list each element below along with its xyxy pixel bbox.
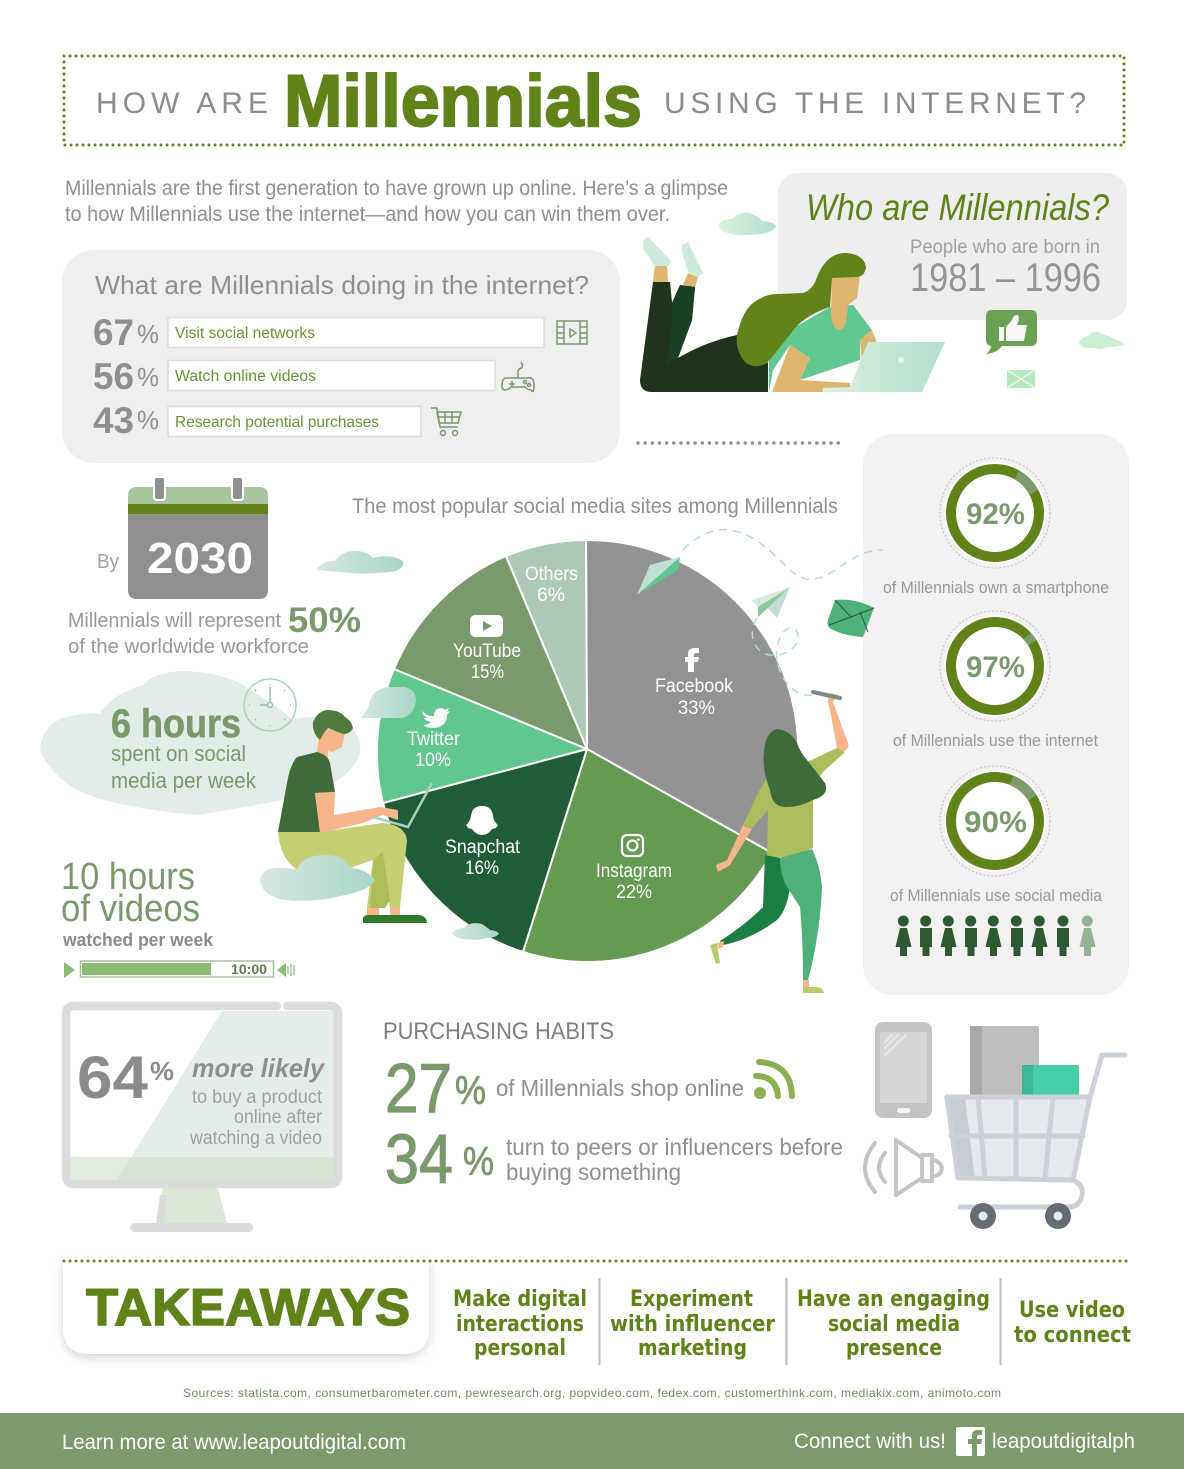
pie label: facebook: 33% — [678, 698, 715, 719]
pie chart: social media sites — [377, 540, 798, 962]
stat: 56 percent: % — [137, 362, 159, 392]
icon: green envelope — [827, 600, 874, 637]
calendar: by 2030: By — [97, 551, 119, 573]
stat: 67 percent: 67 — [93, 312, 134, 353]
dotted divider — [638, 441, 845, 445]
monitor: 64 percent: % — [150, 1056, 174, 1086]
takeaway: social presence: presence — [846, 1336, 942, 1361]
dashed flight paths — [683, 530, 883, 695]
pie label: instagram: 22% — [616, 882, 652, 903]
pie label: facebook — [655, 648, 733, 719]
illustration: woman drawing — [710, 692, 848, 993]
panel: what are millennials doing: What are Millennials doing in the internet? — [95, 270, 589, 300]
footer: leapoutdigitalph — [992, 1430, 1135, 1453]
takeaway: video — [1014, 1298, 1131, 1348]
ring: 97 percent: 97% — [966, 651, 1025, 684]
cloud — [316, 551, 403, 574]
monitor: 64 percent: online after — [234, 1107, 323, 1128]
icon: shopping cart with boxes — [947, 1026, 1125, 1229]
icon: paper plane — [752, 587, 790, 618]
takeaway: personal: interactions — [456, 1312, 584, 1337]
stat: 27 percent: 27 — [385, 1049, 452, 1127]
takeaway: social presence: social media — [828, 1312, 960, 1337]
video progress player — [64, 961, 294, 978]
takeaway: personal: personal — [474, 1336, 566, 1361]
stat: 34 percent: turn to peers or influencers before — [506, 1134, 843, 1160]
pie label: others: Others — [525, 564, 578, 585]
illustration: woman lying with laptop — [640, 237, 945, 392]
pie label: twitter: Twitter — [407, 729, 461, 750]
icon: thumbs up bubble — [986, 310, 1037, 354]
pie label: youtube — [453, 615, 521, 683]
title banner: USING THE INTERNET? — [664, 87, 1086, 120]
ring: 92 percent — [940, 458, 1050, 568]
icon: paper plane — [637, 557, 680, 595]
monitor: 64 percent — [66, 1006, 338, 1232]
takeaway: personal: Make digital — [453, 1287, 587, 1312]
panel: who are millennials: 1981 – 1996 — [910, 256, 1101, 300]
takeaway: influencer: Experiment — [630, 1287, 753, 1312]
caption: smartphone: of Millennials own a smartphone — [883, 578, 1109, 597]
stat: 27 percent: % — [455, 1069, 486, 1113]
pie label: youtube: 15% — [471, 662, 504, 683]
text: 6 hours — [111, 702, 257, 793]
stat: 43 percent — [93, 400, 421, 441]
calendar: by 2030: 2030 — [147, 534, 253, 583]
ring: 90 percent — [940, 766, 1050, 876]
text: 10 hours of videos: 10 hours — [61, 856, 195, 898]
icon: smartphone — [875, 1022, 932, 1118]
illustration: seated man with laptop — [260, 710, 432, 923]
stat: 67 percent: Visit social networks — [175, 325, 315, 342]
intro text: Millennials are the first generation to have grown up online. Here’s a glimpse — [65, 177, 728, 200]
pie label: snapchat: 16% — [465, 858, 499, 879]
ring: 90 percent: 90% — [964, 806, 1027, 839]
text: workforce stat: 50% — [288, 601, 361, 640]
text: workforce stat — [68, 601, 361, 658]
icon: envelope — [1007, 370, 1035, 388]
stat: 56 percent: 56 — [93, 356, 134, 397]
text: 6 hours: spent on social — [111, 741, 246, 766]
monitor: 64 percent: to buy a product — [192, 1087, 323, 1108]
pie label: snapchat: Snapchat — [445, 837, 521, 858]
text: 10 hours of videos: watched per week — [62, 930, 214, 950]
footer — [0, 1413, 1184, 1469]
pie label: others — [525, 564, 578, 606]
ring: 97 percent — [940, 611, 1050, 721]
intro text: to how Millennials use the internet—and how you can win them over. — [65, 203, 670, 226]
stat: 67 percent: % — [137, 319, 159, 349]
cloud — [452, 923, 499, 940]
caption: social media: of Millennials use social media — [890, 886, 1103, 905]
intro text — [65, 177, 728, 226]
heading: pie chart: The most popular social media sites among Millennials — [352, 495, 838, 518]
calendar: by 2030 — [97, 477, 268, 599]
icon: game controller — [502, 362, 534, 391]
takeaway: video: Use video — [1019, 1298, 1125, 1323]
panel: what are millennials doing — [62, 250, 620, 463]
cloud — [719, 213, 776, 235]
panel: device stats — [863, 434, 1129, 995]
monitor: 64 percent: watching a video — [189, 1128, 322, 1149]
icon: speech bubble — [360, 687, 416, 718]
panel: takeaways heading: TAKEAWAYS — [86, 1279, 410, 1337]
caption: internet: of Millennials use the internet — [893, 731, 1098, 750]
stat: 43 percent: % — [137, 405, 159, 435]
panel: who are millennials: People who are born in — [910, 237, 1100, 258]
panel: takeaways heading — [63, 1258, 429, 1357]
icon: facebook — [956, 1427, 985, 1456]
icon: clock cloud background — [40, 671, 360, 815]
stat: 27 percent — [385, 1049, 744, 1127]
stat: 56 percent — [93, 356, 495, 397]
video progress player: 10:00 — [231, 961, 267, 977]
title banner: Millennials — [284, 61, 642, 142]
stat: 56 percent: Watch online videos — [175, 368, 316, 385]
takeaway: social presence: Have an engaging — [797, 1287, 990, 1312]
monitor: 64 percent: 64 — [77, 1044, 149, 1111]
dotted line: takeaways — [64, 1260, 1130, 1262]
text: 6 hours: media per week — [111, 768, 257, 793]
stat: 27 percent: of Millennials shop online — [496, 1075, 744, 1101]
monitor: 64 percent: more likely — [192, 1053, 325, 1083]
stat: 67 percent — [93, 312, 544, 353]
takeaway: social presence — [797, 1287, 990, 1361]
cloud — [1079, 332, 1124, 349]
icon: speaker — [865, 1140, 942, 1195]
panel: who are millennials — [778, 173, 1127, 320]
stat: 34 percent: % — [463, 1140, 494, 1184]
pie label: twitter — [407, 708, 461, 771]
text: 6 hours: 6 hours — [111, 702, 241, 746]
stat: 43 percent: 43 — [93, 400, 134, 441]
icon: shopping cart — [431, 408, 461, 436]
icon: clock — [244, 679, 296, 731]
icon: rss — [754, 1062, 792, 1099]
pie label: others: 6% — [537, 585, 565, 606]
heading: purchasing habits: PURCHASING HABITS — [383, 1018, 614, 1045]
stat: 34 percent: buying something — [506, 1159, 681, 1185]
footer: Connect with us! — [794, 1430, 946, 1453]
text: 10 hours of videos — [61, 856, 214, 950]
pie label: youtube: YouTube — [453, 641, 521, 662]
people row — [896, 916, 1096, 956]
stat: 34 percent — [385, 1120, 843, 1198]
pie label: twitter: 10% — [415, 750, 451, 771]
panel: who are millennials: Who are Millennials? — [806, 187, 1109, 228]
text: workforce stat: of the worldwide workforce — [68, 636, 309, 658]
icon: film strip — [557, 321, 587, 344]
takeaway: influencer — [610, 1287, 775, 1361]
title banner: HOW ARE — [96, 87, 268, 120]
pie label: instagram: Instagram — [596, 861, 672, 882]
stat: 43 percent: Research potential purchases — [175, 414, 379, 431]
ring: 92 percent: 92% — [966, 498, 1025, 531]
takeaway: video: to connect — [1014, 1323, 1131, 1348]
takeaway: influencer: marketing — [638, 1336, 747, 1361]
pie label: snapchat — [445, 806, 521, 879]
stat: 34 percent: 34 — [385, 1120, 453, 1198]
sources: Sources: statista.com, consumerbarometer.com, pewresearch.org, popvideo.com, fedex.com, customerthink.com, mediakix.com, animoto.com — [183, 1386, 1001, 1400]
takeaway: personal — [453, 1287, 587, 1361]
pie label: instagram — [596, 835, 672, 903]
footer: Learn more at www.leapoutdigital.com — [62, 1431, 406, 1454]
pie label: facebook: Facebook — [655, 676, 733, 697]
title banner — [64, 56, 1124, 145]
takeaway: influencer: with influencer — [610, 1312, 775, 1337]
text: 10 hours of videos: of videos — [61, 888, 200, 930]
text: workforce stat: Millennials will represent — [68, 610, 281, 632]
